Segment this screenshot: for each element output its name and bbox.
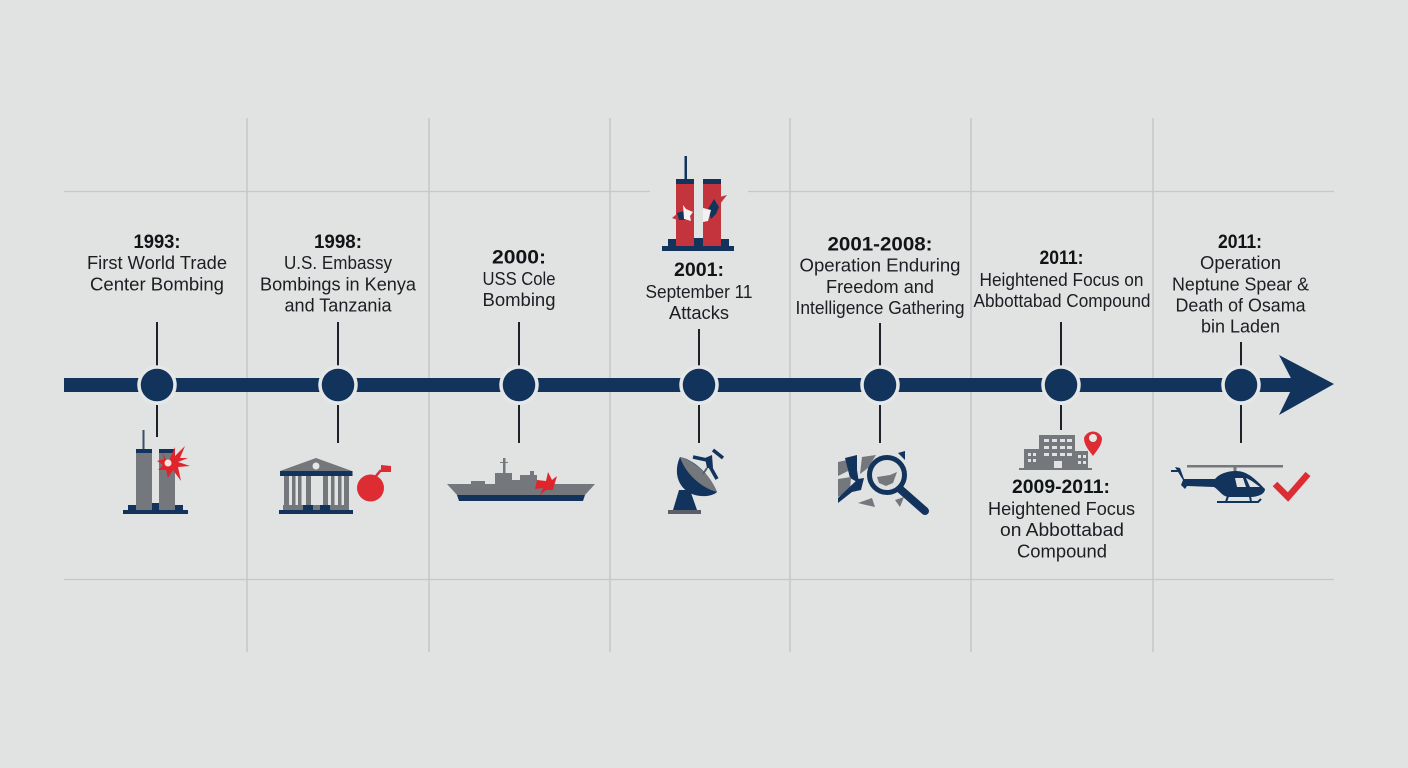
event: 2000 label: 2000: (492, 246, 546, 268)
event: 2001-2008 label: Intelligence Gathering (796, 297, 964, 318)
event: 2011 focus label: 2011: (1040, 247, 1084, 269)
event: 2001 label: 2001: (674, 259, 724, 281)
icon: satellite dish (668, 450, 723, 514)
event: 2011 Neptune Spear label (1172, 231, 1310, 336)
event: 2009-2011 label (988, 476, 1135, 562)
event: 2001-2008 label: Freedom and (826, 276, 934, 297)
event: 1998 label (260, 231, 417, 316)
event: 1993 label: First World Trade (87, 252, 227, 273)
icon: damaged twin towers, September 11 (662, 156, 734, 251)
event: 2001 label: September 11 (646, 281, 752, 302)
icon: warship with blast (447, 458, 595, 501)
event: 2011 Neptune Spear label: 2011: (1218, 231, 1262, 253)
event: 2011 focus label (974, 247, 1150, 311)
arrow head (1279, 355, 1334, 415)
icon: twin towers with explosion (123, 430, 190, 514)
event: 2001 label (646, 259, 752, 323)
event: 1998 label: U.S. Embassy (284, 252, 393, 273)
event: 2009-2011 label: on Abbottabad (1000, 519, 1124, 540)
event: 2011 focus label: Heightened Focus on (980, 269, 1144, 290)
timeline axis with arrow (64, 355, 1334, 415)
event: 2009-2011 label: Heightened Focus (988, 498, 1135, 519)
icon: embassy building and bomb (279, 458, 391, 514)
event: 2000 label: Bombing (482, 289, 556, 310)
event: 1998 label: 1998: (314, 231, 362, 253)
event: 2001-2008 label: 2001-2008: (828, 234, 932, 256)
event: 2009-2011 label: 2009-2011: (1012, 476, 1110, 498)
icon: map and magnifying glass (838, 451, 925, 511)
event: 1998 label: Bombings in Kenya (260, 274, 417, 294)
event: 2001-2008 label (796, 234, 964, 318)
event: 2011 Neptune Spear label: Neptune Spear & (1172, 274, 1310, 294)
event: 1993 label: Center Bombing (90, 274, 224, 294)
event: 2000 label (482, 246, 556, 310)
timeline nodes (139, 367, 1259, 403)
event: 2001-2008 label: Operation Enduring (800, 254, 960, 276)
event: 1993 label: 1993: (134, 231, 180, 253)
icon: compound building with map pin (1019, 432, 1102, 470)
event: 2011 Neptune Spear label: Death of Osama (1176, 294, 1306, 316)
icon: helicopter with check mark (1171, 465, 1308, 502)
event: 2000 label: USS Cole (482, 268, 556, 289)
connector stems (157, 322, 1241, 443)
event: 2009-2011 label: Compound (1017, 540, 1107, 562)
event: 1998 label: and Tanzania (284, 294, 392, 316)
event: 2001 label: Attacks (669, 302, 729, 323)
event: 2011 Neptune Spear label: Operation (1200, 252, 1281, 273)
event: 2011 focus label: Abbottabad Compound (974, 290, 1150, 311)
event: 2011 Neptune Spear label: bin Laden (1201, 316, 1280, 336)
event: 1993 label (87, 231, 227, 294)
